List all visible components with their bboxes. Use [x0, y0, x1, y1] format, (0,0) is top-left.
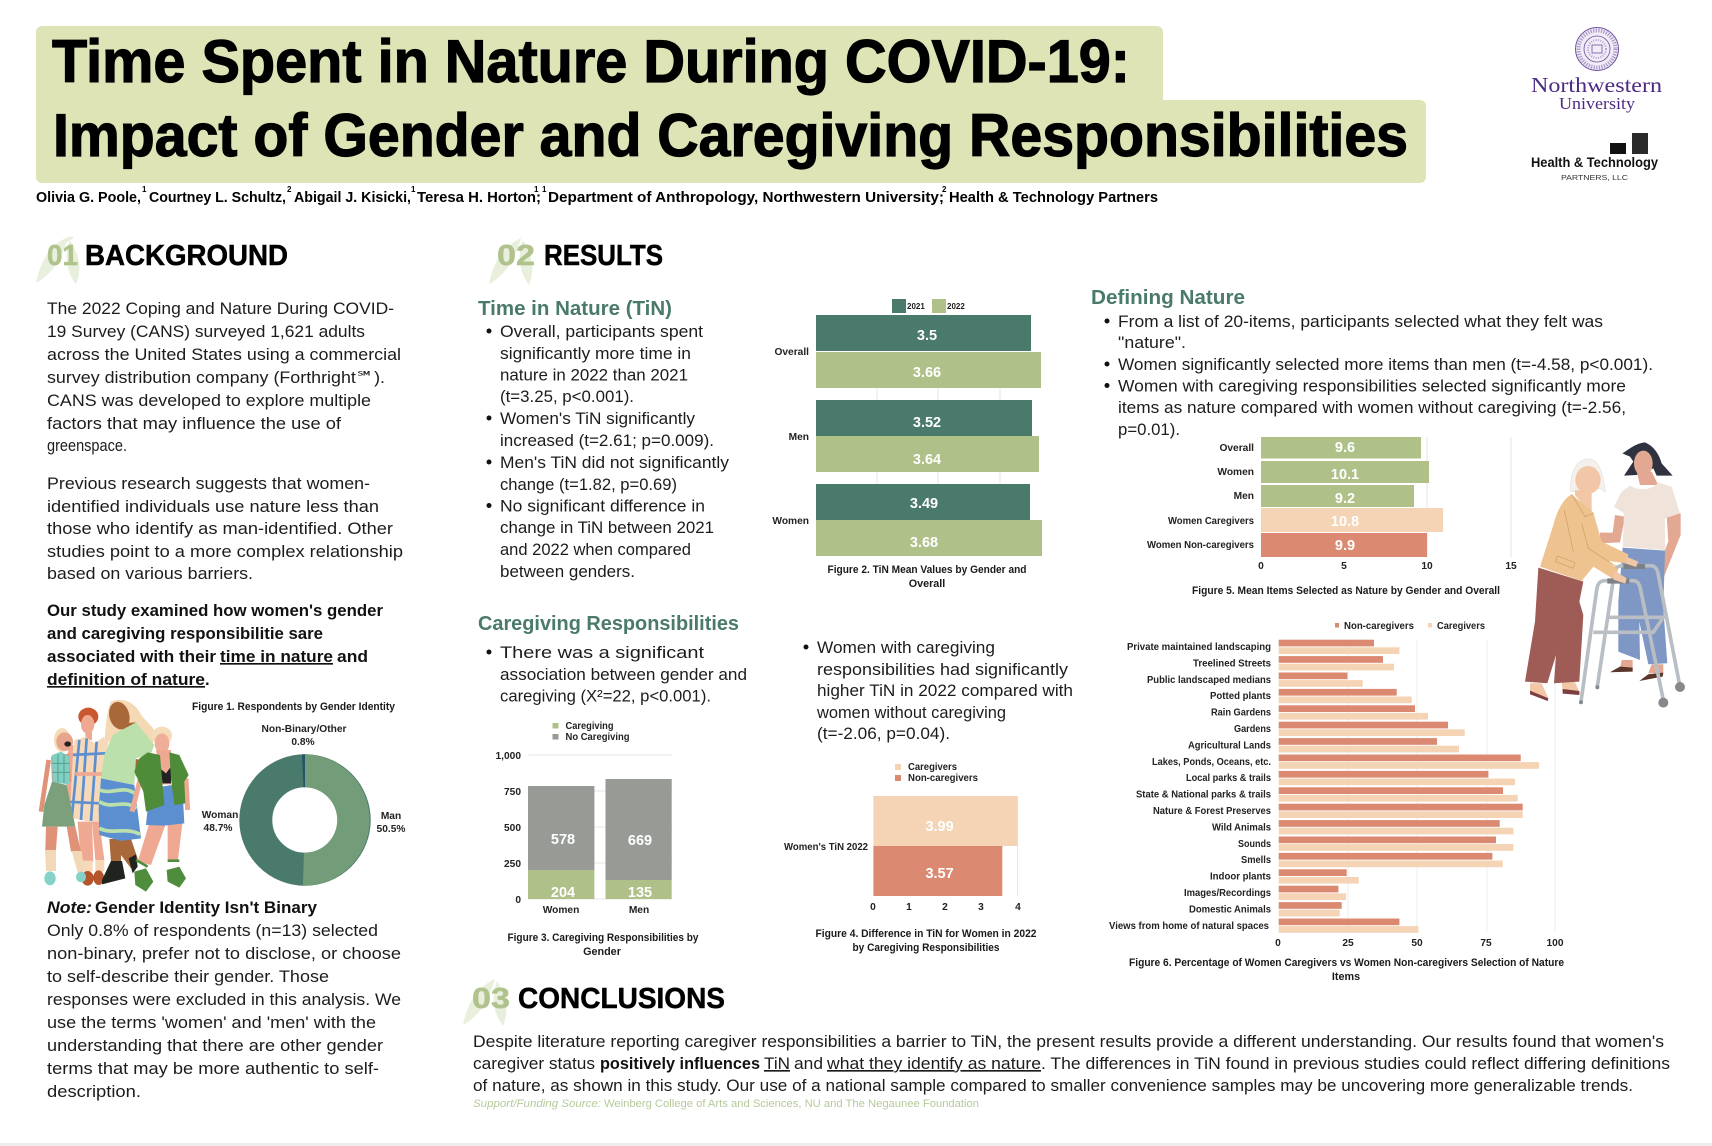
bar chart: figure 2 TiN mean values: [772, 299, 1042, 590]
heading: 02 results: [489, 238, 663, 285]
walker back frame: [1593, 566, 1679, 687]
bar chart: figure 3 caregiving by gender: Women: [543, 905, 579, 916]
bar chart: figure 3 caregiving by gender: 669: [628, 833, 652, 849]
heading: 02 results: RESULTS: [544, 240, 663, 272]
bar chart: figure 6 nature items by caregiver status: Agricultural Lands: [1188, 740, 1271, 751]
heading: 01 background: [36, 236, 288, 284]
bar chart: figure 6 nature items by caregiver status: Rain Gardens: [1211, 708, 1271, 719]
bar chart: figure 4 women's TiN by caregiving: Caregivers: [908, 762, 957, 773]
text block: time in nature: significantly more time in: [500, 345, 691, 363]
authors and affiliations: [36, 185, 1158, 206]
text block: gender identity note: [47, 899, 401, 1101]
text block: gender identity note: Note:: [47, 899, 92, 917]
bar chart: figure 5 mean items selected: Women Non-caregivers: [1147, 540, 1254, 551]
heading: 02 results: 02: [497, 240, 535, 272]
text block: conclusions: and: [794, 1055, 823, 1073]
text block: time in nature: [478, 297, 730, 581]
text block: time in nature: change (t=1.82, p=0.69): [500, 476, 677, 494]
text block: survey description: CANS was developed to explore multiple: [47, 392, 371, 410]
text block: survey description: The 2022 Coping and Nature During COVID-: [47, 300, 394, 318]
bar chart: figure 6 nature items by caregiver status: 25: [1342, 938, 1354, 949]
text block: study aim: associated with their: [47, 648, 217, 666]
text block: study aim: [47, 602, 384, 689]
text block: previous research: [47, 475, 403, 583]
text block: survey description: 19 Survey (CANS) surveyed 1,621 adults: [47, 323, 365, 341]
bar chart: figure 6 nature items by caregiver status: 100: [1546, 938, 1564, 949]
text block: previous research: identified individuals use nature less than: [47, 498, 379, 516]
text block: time in nature: Time in Nature (TiN): [478, 297, 672, 320]
bar chart: figure 6 nature items by caregiver status: Views from home of natural spaces: [1109, 921, 1269, 932]
bar chart: figure 5 mean items selected: Overall: [1219, 443, 1254, 454]
text block: defining nature: p=0.01).: [1118, 421, 1180, 439]
authors and affiliations: 1: [411, 185, 416, 194]
text block: conclusions: . The differences in TiN found in previous studies could reflect differing definitions: [1041, 1055, 1670, 1073]
authors and affiliations: Olivia G. Poole,: [36, 190, 141, 206]
authors and affiliations: 1: [534, 185, 539, 194]
panel: background: [36, 236, 405, 1101]
bar chart: figure 6 nature items by caregiver status: Items: [1332, 971, 1360, 983]
bar chart: figure 6 nature items by caregiver status: Non-caregivers: [1344, 621, 1414, 632]
heading: 01 background: 01: [47, 240, 78, 272]
heading: 01 background: BACKGROUND: [85, 240, 288, 272]
bar chart: figure 3 caregiving by gender: 500: [504, 823, 521, 834]
person three: blue skirt: [99, 700, 154, 884]
hands on walker: [1613, 557, 1638, 584]
bar chart: figure 4 women's TiN by caregiving: Women's TiN 2022: [784, 842, 868, 853]
text block: caregiving responsibilities: [478, 612, 747, 706]
heading: 03 conclusions: CONCLUSIONS: [518, 983, 725, 1015]
text block: conclusions: [473, 1033, 1670, 1095]
bar chart: figure 3 caregiving by gender: [496, 721, 698, 958]
bar chart: figure 3 caregiving by gender: Gender: [583, 946, 622, 958]
text block: defining nature: Defining Nature: [1091, 286, 1245, 309]
text block: survey description: greenspace.: [47, 437, 127, 455]
bar chart: figure 6 nature items by caregiver status: [1109, 621, 1564, 983]
bar chart: figure 5 mean items selected: Women: [1217, 467, 1254, 478]
bar chart: figure 3 caregiving by gender: 578: [551, 832, 575, 848]
bar chart: figure 3 caregiving by gender: 1,000: [496, 751, 521, 762]
bar chart: figure 4 women's TiN by caregiving: 3: [978, 902, 984, 913]
bar chart: figure 5 mean items selected: 15: [1505, 561, 1517, 572]
text block: time in nature: Overall, participants spent: [500, 323, 703, 341]
text block: defining nature: From a list of 20-items, participants selected what they felt was: [1118, 313, 1603, 331]
logo: Northwestern University: Northwestern: [1531, 73, 1663, 97]
text block: previous research: studies point to a more complex relationship: [47, 543, 403, 561]
bar chart: figure 3 caregiving by gender: 135: [628, 885, 652, 901]
text block: caregiver TiN finding: responsibilities had significantly: [817, 661, 1069, 679]
bar chart: figure 6 nature items by caregiver status: Public landscaped medians: [1147, 675, 1271, 686]
text block: caregiving responsibilities: There was a significant: [500, 644, 704, 662]
bar chart: figure 6 nature items by caregiver status: Potted plants: [1210, 691, 1271, 702]
bar chart: figure 3 caregiving by gender: 750: [504, 787, 521, 798]
bar chart: figure 5 mean items selected: 10.1: [1331, 467, 1359, 483]
text block: defining nature: Women significantly selected more items than men (t=-4.58, p<0.001).: [1118, 356, 1653, 374]
bar chart: figure 4 women's TiN by caregiving: 2: [942, 902, 948, 913]
bar chart: figure 2 TiN mean values: 3.66: [913, 365, 941, 381]
bar chart: figure 2 TiN mean values: Men: [789, 432, 809, 443]
text block: defining nature: Women with caregiving responsibilities selected significantly more: [1118, 378, 1626, 396]
authors and affiliations: 1: [542, 185, 547, 194]
chart: gender identity donut: Figure 1. Respondents by Gender Identity: [192, 701, 395, 713]
icon: group of four people: [41, 700, 189, 892]
bar chart: figure 6 nature items by caregiver status: Domestic Animals: [1189, 904, 1271, 915]
text block: defining nature: items as nature compared with women without caregiving (t=-2.56,: [1118, 399, 1626, 417]
chart: gender identity donut: Non-Binary/Other: [262, 724, 346, 735]
authors and affiliations: 2: [942, 185, 947, 194]
text block: gender identity note: understanding that there are other gender: [47, 1037, 384, 1055]
bar chart: figure 6 nature items by caregiver status: State & National parks & trails: [1136, 790, 1271, 801]
bar chart: figure 2 TiN mean values: 2022: [947, 302, 965, 311]
bar chart: figure 4 women's TiN by caregiving: 0: [870, 902, 876, 913]
bar chart: figure 2 TiN mean values: Figure 2. TiN Mean Values by Gender and: [828, 564, 1026, 576]
person three hair: [104, 700, 156, 760]
bar chart: figure 2 TiN mean values: 3.5: [917, 328, 937, 344]
text block: survey description: across the United States using a commercial: [47, 346, 401, 364]
text block: caregiver TiN finding: Women with caregiving: [817, 639, 995, 657]
chart: gender identity donut: Man: [381, 811, 401, 822]
text block: conclusions: what they identify as nature: [826, 1055, 1041, 1073]
chart: gender identity donut: [192, 701, 405, 886]
text block: caregiver TiN finding: (t=-2.06, p=0.04).: [817, 725, 950, 743]
text block: study aim: and caregiving responsibilitie sare: [47, 625, 323, 643]
text block: survey description: factors that may influence the use of: [47, 415, 341, 433]
authors and affiliations: Courtney L. Schultz,: [149, 190, 286, 206]
panel: conclusions: [463, 979, 1670, 1110]
bar chart: figure 6 nature items by caregiver status: Private maintained landscaping: [1127, 642, 1271, 653]
bar chart: figure 6 nature items by caregiver status: Nature & Forest Preserves: [1153, 806, 1271, 817]
person four: green jacket: [132, 727, 189, 892]
logo: Northwestern University: University: [1559, 94, 1636, 113]
bar chart: figure 6 nature items by caregiver status: Treelined Streets: [1193, 658, 1271, 669]
bar chart: figure 2 TiN mean values: 3.52: [913, 415, 941, 431]
logo: Northwestern University: [1531, 28, 1663, 113]
bar chart: figure 5 mean items selected: 10: [1421, 561, 1433, 572]
text block: defining nature: [1091, 286, 1653, 439]
bar chart: figure 5 mean items selected: 0: [1258, 561, 1264, 572]
text block: conclusions: positively influences: [600, 1055, 760, 1073]
authors and affiliations: Teresa H. Horton;: [417, 190, 541, 206]
text block: defining nature: "nature".: [1118, 334, 1186, 352]
bar chart: figure 4 women's TiN by caregiving: 4: [1015, 902, 1021, 913]
text block: conclusions: TiN: [764, 1055, 790, 1073]
text block: conclusions: caregiver status: [473, 1055, 595, 1073]
panel: results: [478, 238, 1685, 983]
text block: survey description: survey distribution company (Forthright℠).: [47, 369, 385, 387]
bar chart: figure 5 mean items selected: Figure 5. Mean Items Selected as Nature by Gender and Overall: [1192, 585, 1500, 597]
bar chart: figure 6 nature items by caregiver status: Wild Animals: [1212, 822, 1271, 833]
bar chart: figure 3 caregiving by gender: 204: [551, 885, 575, 901]
older woman: [1525, 459, 1628, 701]
bar chart: figure 5 mean items selected: 9.6: [1335, 440, 1355, 456]
text block: time in nature: increased (t=2.61; p=0.009).: [500, 432, 714, 450]
bar chart: figure 4 women's TiN by caregiving: 3.57: [925, 866, 954, 882]
text block: study aim: and: [337, 648, 368, 666]
bar chart: figure 4 women's TiN by caregiving: Figure 4. Difference in TiN for Women in 2022: [816, 928, 1036, 940]
authors and affiliations: Health & Technology Partners: [949, 190, 1158, 206]
younger woman: [1600, 442, 1681, 681]
bar chart: figure 2 TiN mean values: 3.64: [913, 452, 941, 468]
bar chart: figure 2 TiN mean values: 3.49: [910, 496, 938, 512]
authors and affiliations: 1: [142, 185, 147, 194]
text block: gender identity note: description.: [47, 1083, 141, 1101]
bar chart: figure 6 nature items by caregiver status: Local parks & trails: [1186, 773, 1271, 784]
text block: gender identity note: non-binary, prefer not to disclose, or choose: [47, 945, 401, 963]
bar chart: figure 4 women's TiN by caregiving: Non-caregivers: [908, 773, 978, 784]
logo: Health and Technology Partners: PARTNERS, LLC: [1561, 173, 1629, 182]
text block: gender identity note: to self-describe their gender. Those: [47, 968, 329, 986]
text block: time in nature: No significant difference in: [500, 498, 705, 516]
bar chart: figure 2 TiN mean values: Women: [772, 516, 809, 527]
bar chart: figure 3 caregiving by gender: Men: [629, 905, 649, 916]
bar chart: figure 6 nature items by caregiver status: Indoor plants: [1210, 872, 1271, 883]
bar chart: figure 4 women's TiN by caregiving: 3.99: [925, 819, 954, 835]
person two: checked dress: [65, 708, 107, 886]
text block: gender identity note: terms that may be more authentic to self-: [47, 1060, 379, 1078]
text block: previous research: based on various barriers.: [47, 565, 253, 583]
text block: caregiving responsibilities: association between gender and: [500, 666, 747, 684]
bar chart: figure 3 caregiving by gender: 0: [515, 895, 521, 906]
text block: caregiver TiN finding: higher TiN in 2022 compared with: [817, 682, 1073, 700]
logo: Health and Technology Partners: [1531, 133, 1658, 182]
text block: caregiving responsibilities: caregiving (X²=22, p<0.001).: [500, 688, 711, 706]
text block: time in nature: Women's TiN significantly: [500, 410, 696, 428]
bar chart: figure 2 TiN mean values: Overall: [909, 578, 945, 590]
text block: study aim: Our study examined how women's gender: [47, 602, 384, 620]
bar chart: figure 4 women's TiN by caregiving: 1: [906, 902, 912, 913]
text block: time in nature: (t=3.25, p<0.001).: [500, 388, 634, 406]
icon: university seal: [1576, 28, 1618, 70]
bar chart: figure 5 mean items selected: Men: [1234, 491, 1254, 502]
bar chart: figure 2 TiN mean values: 2021: [907, 302, 925, 311]
bar chart: figure 5 mean items selected: 9.2: [1335, 491, 1355, 507]
text block: gender identity note: Gender Identity Isn't Binary: [95, 899, 318, 917]
bar chart: figure 6 nature items by caregiver status: Figure 6. Percentage of Women Caregivers vs Women Non-caregivers Selection of Nature: [1129, 957, 1564, 969]
text block: gender identity note: use the terms 'women' and 'men' with the: [47, 1014, 376, 1032]
heading: 03 conclusions: [463, 979, 725, 1026]
text block: funding source: Weinberg College of Arts and Sciences, NU and The Negaunee Foundation: [604, 1098, 979, 1110]
text block: funding source: Support/Funding Source:: [473, 1098, 601, 1110]
bar chart: figure 5 mean items selected: 9.9: [1335, 538, 1355, 554]
text block: survey description: [47, 300, 401, 455]
text block: previous research: Previous research suggests that women-: [47, 475, 370, 493]
text block: study aim: .: [205, 671, 210, 689]
bar chart: figure 6 nature items by caregiver status: 0: [1275, 938, 1281, 949]
bar chart: figure 6 nature items by caregiver status: Caregivers: [1437, 621, 1485, 632]
chart: gender identity donut: 48.7%: [204, 823, 232, 834]
text block: caregiver TiN finding: [804, 639, 1073, 743]
heading: 03 conclusions: 03: [472, 983, 510, 1015]
chart: gender identity donut: 0.8%: [291, 737, 315, 748]
bar chart: figure 3 caregiving by gender: No Caregiving: [566, 732, 630, 743]
bar chart: figure 6 nature items by caregiver status: Images/Recordings: [1184, 888, 1271, 899]
text block: time in nature: Men's TiN did not significantly: [500, 454, 730, 472]
authors and affiliations: Department of Anthropology, Northwestern University;: [548, 190, 944, 206]
text block: time in nature: and 2022 when compared: [500, 541, 691, 559]
text block: caregiving responsibilities: Caregiving Responsibilities: [478, 612, 739, 635]
text block: previous research: those who identify as man-identified. Other: [47, 520, 394, 538]
bar chart: figure 4 women's TiN by caregiving: [784, 762, 1036, 954]
text block: study aim: time in nature: [220, 648, 333, 666]
title banner: Time Spent in Nature During COVID-19:: [52, 28, 1130, 95]
icon: caregiver helping older woman with walker: [1525, 442, 1685, 708]
chart: gender identity donut: Woman: [202, 810, 238, 821]
title banner: Impact of Gender and Caregiving Responsibilities: [53, 102, 1408, 169]
bar chart: figure 5 mean items selected: Women Caregivers: [1168, 516, 1254, 527]
bar chart: figure 2 TiN mean values: 3.68: [910, 535, 938, 551]
bar chart: figure 4 women's TiN by caregiving: by Caregiving Responsibilities: [852, 942, 1000, 954]
walker front frame: [1581, 581, 1663, 702]
walker handles and wheels: [1579, 564, 1685, 708]
person one: green skirt: [41, 728, 86, 885]
text block: conclusions: Despite literature reporting caregiver responsibilities a barrier to TiN, the present results provide a different understanding. Our results found that women's: [473, 1033, 1664, 1051]
bar chart: figure 2 TiN mean values: Overall: [774, 347, 809, 358]
chart: gender identity donut: 50.5%: [377, 824, 405, 835]
authors and affiliations: 2: [287, 185, 292, 194]
text block: gender identity note: Only 0.8% of respondents (n=13) selected: [47, 922, 378, 940]
bar chart: figure 6 nature items by caregiver status: 75: [1480, 938, 1492, 949]
text block: gender identity note: responses were excluded in this analysis. We: [47, 991, 401, 1009]
text block: caregiver TiN finding: women without caregiving: [816, 704, 1006, 722]
title banner: [36, 26, 1426, 183]
bar chart: figure 3 caregiving by gender: Caregiving: [566, 721, 614, 732]
bar chart: figure 6 nature items by caregiver status: Lakes, Ponds, Oceans, etc.: [1152, 757, 1271, 768]
bar chart: figure 6 nature items by caregiver status: 50: [1411, 938, 1423, 949]
bar chart: figure 6 nature items by caregiver status: Gardens: [1234, 724, 1271, 735]
text block: time in nature: between genders.: [500, 563, 635, 581]
logo: Health and Technology Partners: Health & Technology: [1531, 155, 1658, 170]
bar chart: figure 5 mean items selected: [1147, 437, 1517, 597]
text block: study aim: definition of nature: [47, 671, 205, 689]
bar chart: figure 3 caregiving by gender: Figure 3. Caregiving Responsibilities by: [508, 932, 698, 944]
text block: time in nature: nature in 2022 than 2021: [500, 366, 688, 384]
text block: time in nature: change in TiN between 2021: [500, 519, 714, 537]
bar chart: figure 6 nature items by caregiver status: Smells: [1241, 855, 1271, 866]
bar chart: figure 5 mean items selected: 10.8: [1331, 514, 1359, 530]
text block: conclusions: of nature, as shown in this study. Our use of a national sample compared to smaller convenience samples may be uncovering more generalizable trends.: [473, 1077, 1633, 1095]
bar chart: figure 6 nature items by caregiver status: Sounds: [1238, 839, 1271, 850]
bar chart: figure 5 mean items selected: 5: [1341, 561, 1347, 572]
authors and affiliations: Abigail J. Kisicki,: [294, 190, 411, 206]
bar chart: figure 3 caregiving by gender: 250: [504, 859, 521, 870]
